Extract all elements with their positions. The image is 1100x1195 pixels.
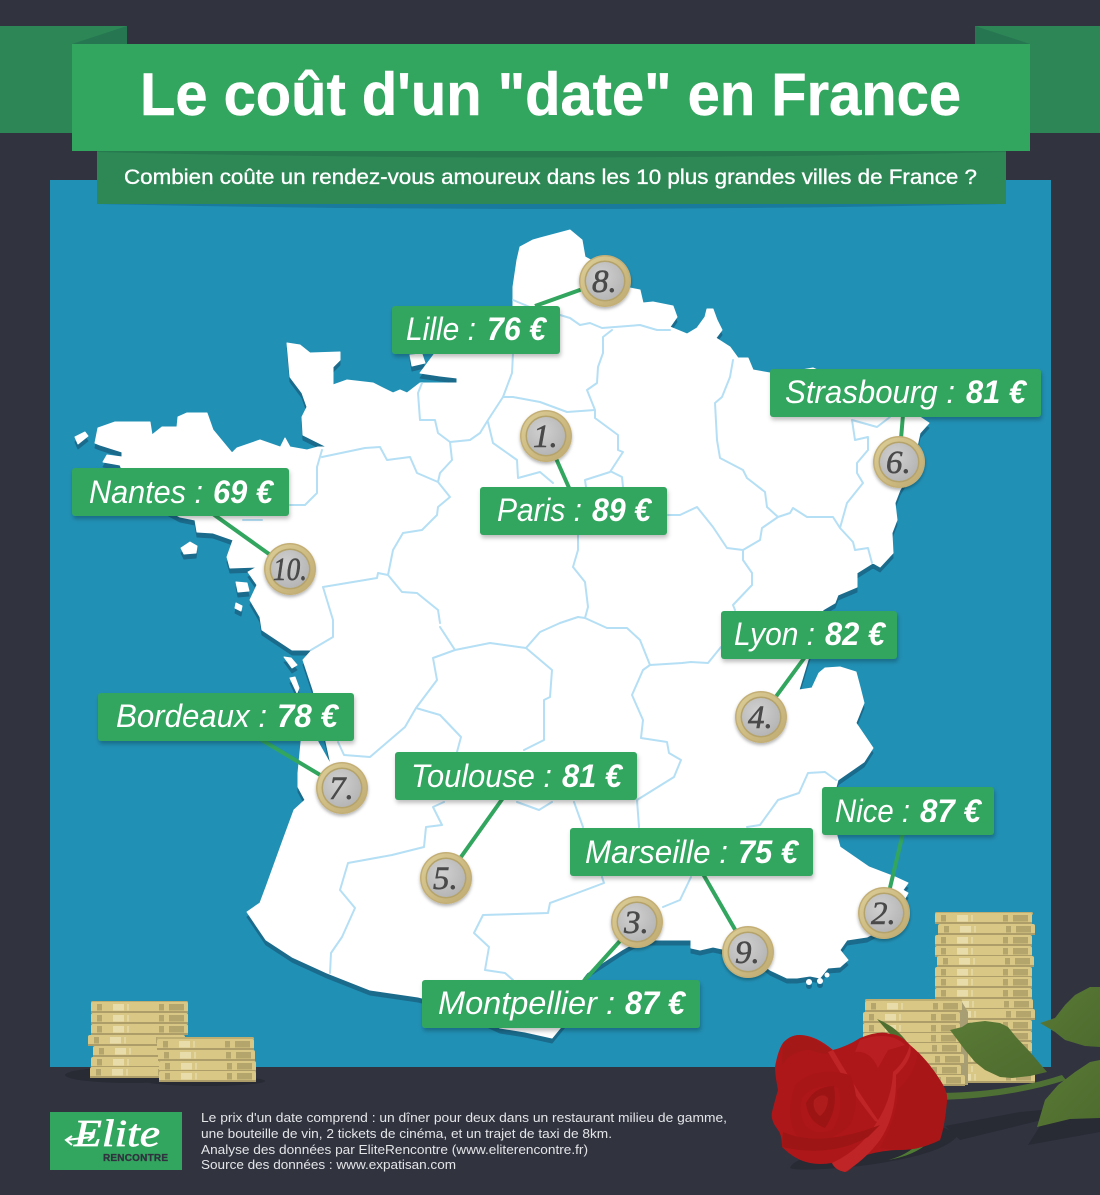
subtitle: Combien coûte un rendez-vous amoureux dans les 10 plus grandes villes de France ? [124, 165, 977, 189]
logo [50, 1112, 182, 1170]
label: Bordeaux [98, 693, 354, 741]
label: Strasbourg: Strasbourg : [785, 374, 955, 410]
label: Paris: 89 € [592, 492, 653, 528]
label: Montpellier: 87 € [625, 985, 687, 1021]
coin 5 [420, 852, 472, 904]
label: Toulouse: 81 € [562, 758, 624, 794]
logo: Elite [73, 1113, 160, 1155]
flower [772, 1033, 947, 1172]
label: Marseille [570, 828, 813, 876]
label: Strasbourg: 81 € [966, 374, 1028, 410]
connector lines [213, 281, 903, 982]
label: Lille: 76 € [487, 311, 548, 347]
coin 5: 5. [433, 861, 458, 897]
coin 7 [316, 762, 368, 814]
ribbon: left tail [0, 26, 127, 133]
rose shadow [790, 1100, 1100, 1170]
coin 2: 2. [871, 896, 896, 932]
label: Strasbourg [770, 369, 1041, 417]
footer note: Source des données : www.expatisan.com [201, 1157, 456, 1172]
label: Marseille: Marseille : [585, 834, 728, 870]
label: Nantes [72, 468, 289, 516]
subtitle ribbon [97, 151, 1006, 209]
coin 8: 8. [592, 264, 617, 300]
map of France [75, 230, 929, 1043]
coin stacks: bottom left [65, 1001, 265, 1086]
rose [772, 987, 1100, 1172]
coin 3 [611, 896, 663, 948]
label: Nantes: 69 € [213, 474, 275, 510]
coin 2 [858, 887, 910, 939]
label: Paris [480, 487, 667, 535]
sepal: upper [877, 1019, 912, 1050]
coin stacks: bottom right [863, 912, 1035, 1086]
label: Lille [392, 306, 560, 354]
footer note: une bouteille de vin, 2 tickets de cinéma, et un trajet de taxi de 8km. [201, 1126, 612, 1141]
coin 9: 9. [735, 935, 760, 971]
coin 10 [264, 543, 316, 595]
title banner [72, 44, 1030, 151]
label: Lille: Lille : [406, 311, 476, 347]
footer note: Le prix d'un date comprend : un dîner pour deux dans un restaurant milieu de gamme, [201, 1110, 727, 1125]
label: Nice: 87 € [920, 793, 983, 829]
leaf: centre [950, 1021, 1047, 1078]
coin 8 [579, 255, 631, 307]
panel: blue map background [50, 180, 1051, 1067]
label: Lyon [721, 611, 897, 659]
coin 4: 4. [748, 700, 773, 736]
label: Marseille: 75 € [738, 834, 800, 870]
label: Lyon: 82 € [825, 616, 887, 652]
title: Le coût d'un "date" en France [140, 61, 961, 128]
coin 9 [722, 926, 774, 978]
leaf: upper right [1040, 987, 1100, 1047]
label: Bordeaux: 78 € [277, 698, 340, 734]
label: Montpellier [422, 980, 700, 1028]
ribbon: right tail [975, 26, 1100, 133]
label: Lyon: Lyon : [734, 616, 815, 652]
footer note [201, 1110, 727, 1172]
leaf: lower right [1037, 1060, 1100, 1127]
label: Nice [822, 787, 994, 835]
label: Nice: Nice : [835, 793, 910, 829]
coin 3: 3. [623, 905, 649, 941]
coin 4 [735, 691, 787, 743]
label: Toulouse [395, 752, 637, 800]
coin 1: 1. [533, 419, 558, 455]
stem [940, 1075, 1066, 1100]
label: Toulouse: Toulouse : [411, 758, 552, 794]
coin 7: 7. [329, 771, 354, 807]
sepal: lower [888, 1095, 945, 1160]
footer note: Analyse des données par EliteRencontre (www.eliterencontre.fr) [201, 1142, 588, 1157]
logo: RENCONTRE [103, 1153, 168, 1164]
coin 10: 10. [273, 552, 307, 588]
coin 6 [873, 436, 925, 488]
label: Montpellier: Montpellier : [438, 985, 615, 1021]
label: Bordeaux: Bordeaux : [116, 698, 267, 734]
coin 6: 6. [886, 445, 911, 481]
coin 1 [520, 410, 572, 462]
label: Nantes: Nantes : [89, 474, 203, 510]
label: Paris: Paris : [497, 492, 582, 528]
